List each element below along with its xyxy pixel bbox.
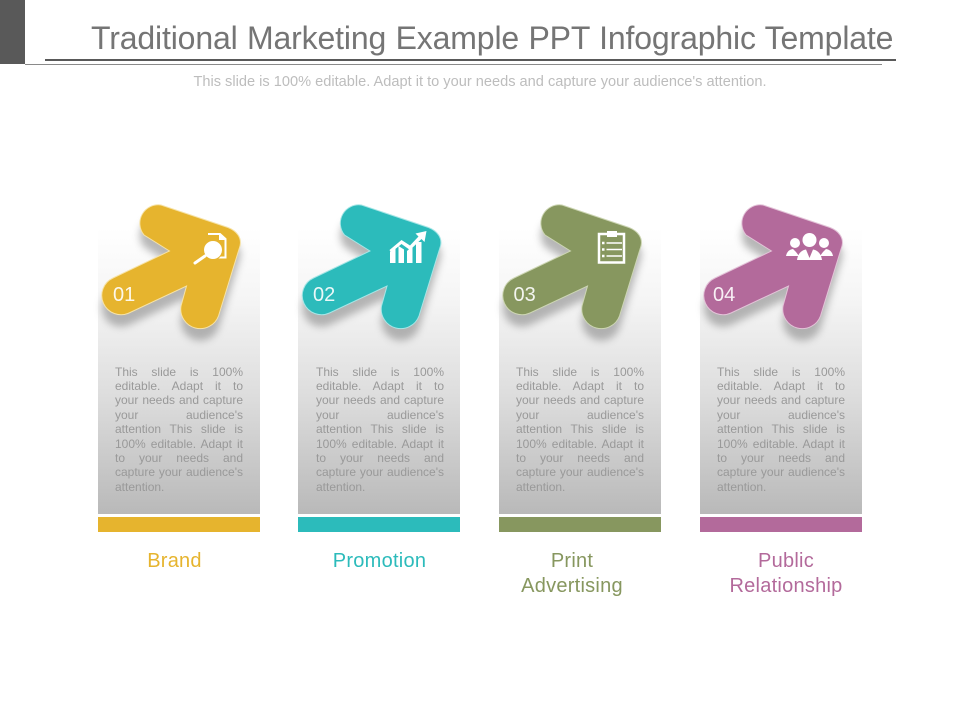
text block: promotion: attention This slide is [316, 422, 444, 436]
text block: print advertising: editable. Adapt it to [516, 379, 644, 393]
icon: document with magnifier [195, 233, 226, 263]
text block: brand [115, 364, 243, 494]
text block: public relationship: your needs and capture [717, 393, 845, 407]
label: print advertising: Advertising [521, 575, 623, 597]
text block: public relationship: 100% editable. Adapt it [717, 437, 845, 451]
label: brand: Brand [147, 550, 202, 572]
text block: print advertising: attention. [516, 480, 565, 494]
subtitle: This slide is 100% editable. Adapt it to your needs and capture your audience's attention. [193, 74, 767, 90]
text block: public relationship: attention. [717, 480, 766, 494]
text block: public relationship: attention This slide is [717, 422, 845, 436]
text block: print advertising: your audience's [516, 408, 644, 422]
text block: public relationship: your audience's [717, 408, 845, 422]
text block: promotion [316, 364, 444, 494]
label: print advertising [521, 550, 623, 597]
arrow: brand [102, 205, 240, 341]
text block: brand: capture your audience's [115, 465, 243, 479]
text block: promotion: your audience's [316, 408, 444, 422]
text block: brand: editable. Adapt it to [115, 379, 243, 393]
text block: public relationship: editable. Adapt it to [717, 379, 845, 393]
color bar: print advertising [499, 517, 661, 532]
text block: promotion: attention. [316, 480, 365, 494]
text block: brand: attention This slide is [115, 422, 243, 436]
panel: print advertising background [499, 228, 661, 514]
text block: brand: 100% editable. Adapt it [115, 437, 243, 451]
text block: print advertising: attention This slide is [516, 422, 644, 436]
text block: brand: your audience's [115, 408, 243, 422]
text block: promotion: to your needs and [316, 451, 444, 465]
label: public relationship [729, 550, 843, 597]
text block: print advertising: This slide is 100% [516, 364, 644, 378]
panel: promotion background [298, 228, 460, 514]
text block: promotion: This slide is 100% [316, 364, 444, 378]
text block: print advertising [516, 364, 644, 494]
arrow number: 02: 02 [313, 284, 335, 306]
color bar: promotion [298, 517, 460, 532]
text block: print advertising: capture your audience's [516, 465, 644, 479]
icon: growth chart [390, 231, 426, 263]
text block: public relationship [717, 364, 845, 494]
text block: brand: your needs and capture [115, 393, 243, 407]
icon: clipboard checklist [599, 231, 624, 262]
arrow number: 01: 01 [113, 284, 135, 306]
text block: print advertising: 100% editable. Adapt it [516, 437, 644, 451]
text block: promotion: capture your audience's [316, 465, 444, 479]
arrow: print advertising [503, 205, 641, 341]
label: print advertising: Print [551, 550, 593, 572]
text block: public relationship: to your needs and [717, 451, 845, 465]
arrow: public relationship [704, 205, 842, 341]
icon: group of people [786, 233, 833, 260]
label: public relationship: Public [758, 550, 814, 572]
panel: brand background [98, 228, 260, 514]
label: promotion: Promotion [333, 550, 426, 572]
arrow: promotion [302, 205, 441, 341]
text block: promotion: your needs and capture [316, 393, 444, 407]
color bar: brand [98, 517, 260, 532]
text block: brand: This slide is 100% [115, 364, 243, 378]
text block: promotion: 100% editable. Adapt it [316, 437, 444, 451]
arrow number: 04: 04 [713, 284, 735, 306]
arrow number: 03: 03 [514, 284, 536, 306]
panel: public relationship background [700, 228, 862, 514]
label: public relationship: Relationship [729, 575, 843, 597]
text block: print advertising: to your needs and [516, 451, 644, 465]
text block: public relationship: This slide is 100% [717, 364, 845, 378]
title: Traditional Marketing Example PPT Infographic Template [91, 20, 893, 56]
text block: promotion: editable. Adapt it to [316, 379, 444, 393]
header block [0, 0, 25, 64]
text block: brand: attention. [115, 480, 164, 494]
text block: public relationship: capture your audience's [717, 465, 845, 479]
text block: brand: to your needs and [115, 451, 243, 465]
text block: print advertising: your needs and capture [516, 393, 644, 407]
color bar: public relationship [700, 517, 862, 532]
